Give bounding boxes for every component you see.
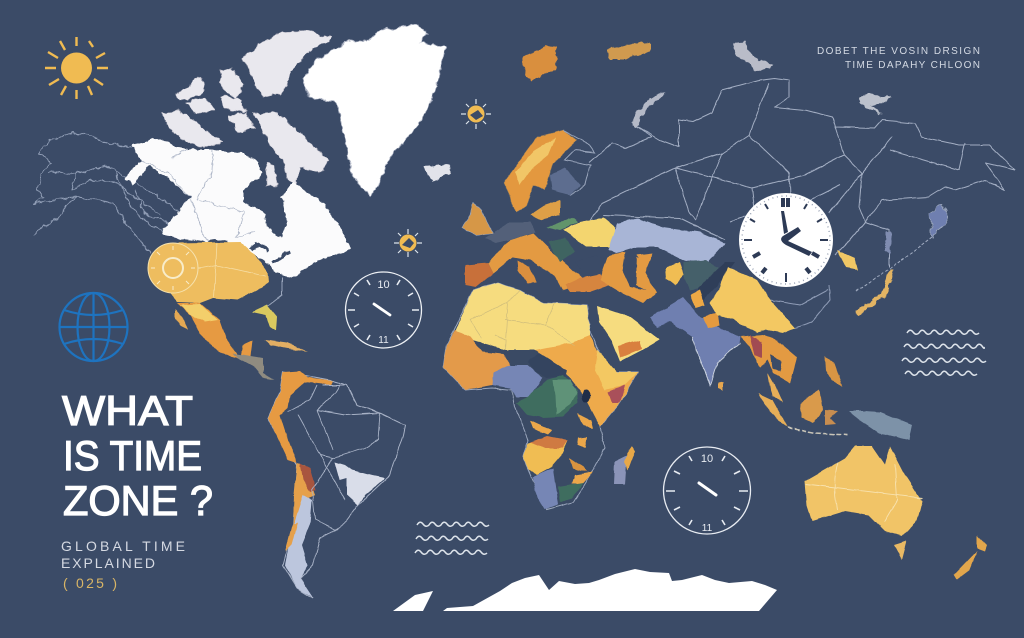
continent outline (268, 372, 405, 598)
Australia (805, 446, 922, 536)
Chile band (293, 463, 315, 528)
Nepal orange (703, 312, 720, 328)
Sahara yellow (455, 283, 590, 350)
France dark (485, 222, 535, 243)
Italy (517, 260, 537, 284)
Scandinavia yellow highlight (515, 138, 555, 185)
Baja California (175, 309, 188, 330)
Arabian Sea inlet (698, 262, 735, 303)
West and central Europe (488, 233, 587, 290)
Java chain (788, 427, 847, 435)
Central Europe green (548, 238, 575, 262)
Borneo (800, 390, 823, 423)
panel: Continental USA and Central America (150, 242, 282, 331)
Central blue (492, 365, 543, 397)
India coast (693, 337, 740, 385)
north coast orange (268, 371, 333, 463)
decorative waves: South Atlantic (415, 522, 489, 554)
Manchuria oval (837, 250, 858, 270)
Tasmania (894, 541, 907, 560)
Alaska and western Canada outline (33, 133, 190, 253)
West Africa orange (443, 330, 512, 390)
China yellow (710, 267, 795, 333)
Australia state lines (806, 462, 922, 522)
Central navy (527, 353, 567, 378)
text block: title (62, 387, 213, 524)
Franz Josef Land (607, 42, 650, 58)
Patagonia pale (285, 495, 313, 597)
icon: sun dial over US west (148, 243, 198, 293)
Afghanistan yellow (665, 262, 684, 285)
Southeast Asia (740, 335, 797, 383)
Angola top orange (530, 436, 568, 448)
South Africa blue (533, 468, 558, 510)
clock: Atlantic outline: 11 (378, 335, 389, 346)
text block: subtitle: EXPLAINED (61, 555, 155, 571)
Sumatra (758, 393, 788, 427)
icon: small sun Atlantic (394, 229, 422, 257)
Central America (233, 353, 275, 380)
Central Asia dark green (684, 260, 720, 290)
Sulawesi (825, 410, 838, 425)
Orange patches (530, 420, 552, 434)
panel: Oceania (805, 446, 987, 580)
icon: globe (60, 293, 128, 361)
Cuba (265, 340, 308, 352)
Congo light green (553, 380, 577, 415)
panel: Russia and Asia outline (589, 78, 1015, 328)
clock: Atlantic outline (346, 272, 422, 348)
text block: subtitle: ( 025 ) (63, 575, 117, 591)
icon: small sun north (461, 99, 491, 129)
Ukraine yellow (563, 217, 615, 247)
Mexico (177, 303, 240, 358)
United States (150, 242, 268, 303)
Sahara borders (470, 290, 575, 350)
New Guinea (849, 411, 912, 440)
Persia blue (650, 297, 740, 385)
text block: title: WHAT (62, 387, 193, 434)
Orange patch south (572, 472, 593, 484)
Malay Peninsula (768, 373, 783, 403)
text block: title: IS TIME (63, 432, 202, 479)
clock: Atlantic outline: 10 (377, 279, 390, 291)
Sri Lanka (718, 382, 723, 391)
Horn yellow (595, 350, 638, 390)
Kola outline (563, 130, 595, 195)
text block: top right caption: TIME DAPAHY CHLOON (845, 60, 980, 71)
panel: Central and South Asia (597, 218, 912, 440)
Denmark / Baltic (530, 200, 560, 220)
Svalbard (522, 45, 557, 83)
Horn crimson (608, 385, 625, 403)
Yucatan (240, 341, 253, 358)
Lake Victoria (582, 389, 590, 403)
Mexico north highlight (180, 304, 218, 322)
Canada province lines (140, 150, 255, 242)
South Africa green (558, 483, 583, 503)
Japan (855, 270, 894, 315)
panel: North America (33, 24, 452, 277)
UK (462, 203, 493, 235)
Madagascar (614, 455, 627, 485)
text block: title: ZONE ? (63, 477, 213, 524)
Black Sea (575, 255, 610, 270)
Scandinavia (503, 130, 577, 212)
Arabia south orange (618, 340, 642, 358)
panel: Europe (462, 130, 615, 292)
Finland blue (550, 168, 580, 195)
Orange patch Zambia (577, 437, 587, 448)
New Zealand south (954, 551, 977, 580)
Novaya Zemlya (632, 92, 665, 128)
Myanmar crimson (750, 335, 762, 358)
Pakistan orange (690, 290, 705, 308)
icon: large sun (45, 37, 108, 99)
Sakhalin sliver (886, 230, 892, 255)
Arctic islands (163, 31, 333, 187)
Arabia (597, 306, 660, 362)
clock: Indian Ocean outline (664, 447, 750, 534)
East coast outline (268, 278, 282, 306)
Madagascar orange (624, 446, 635, 470)
panel: Africa (443, 283, 638, 510)
country borders (288, 385, 380, 530)
Kamchatka (930, 203, 949, 237)
US state lines (190, 243, 265, 298)
US east coast and Florida (252, 305, 277, 331)
Philippines (825, 357, 843, 387)
Andes south orange (285, 522, 298, 552)
panel: Arctic islands of Eurasia (522, 42, 949, 315)
continent base (443, 283, 638, 510)
Canada mainland (125, 138, 350, 277)
Baltic green strip (547, 218, 578, 230)
New Zealand north (977, 535, 987, 551)
Iceland (423, 165, 452, 182)
Angola and Namibia (523, 438, 568, 475)
Peru highland dark (300, 463, 316, 492)
Congo green (517, 375, 578, 418)
Orange patch east (577, 413, 593, 430)
clock: Indian Ocean outline: 11 (702, 523, 713, 534)
Sahel east orange (535, 335, 638, 427)
Pampas pale (335, 462, 385, 505)
Greenland (303, 24, 445, 197)
panel: Antarctica (393, 569, 777, 611)
Iran and Caucasus orange (600, 252, 657, 303)
Gulf of Thailand (770, 355, 782, 372)
text block: top right caption (817, 46, 980, 71)
decorative waves: Pacific (902, 330, 986, 375)
Orange patch Mozambique (569, 458, 587, 472)
Kazakhstan pale blue (608, 218, 725, 263)
clock: Indian Ocean outline: 10 (701, 453, 713, 465)
Novosibirsk islands (859, 94, 890, 115)
panel: Latin America north (175, 303, 308, 380)
text block: subtitle (61, 538, 185, 591)
panel: South America (268, 371, 405, 598)
Great Lakes (250, 245, 290, 262)
text block: subtitle: GLOBAL TIME (61, 538, 185, 554)
text block: top right caption: DOBET THE VOSIN DRSIGN (817, 46, 980, 57)
Turkey (565, 274, 610, 292)
Caspian Sea (622, 252, 646, 290)
Severnaya Zemlya (732, 42, 774, 72)
Iberia (465, 263, 493, 287)
clock: large white face (739, 193, 833, 287)
